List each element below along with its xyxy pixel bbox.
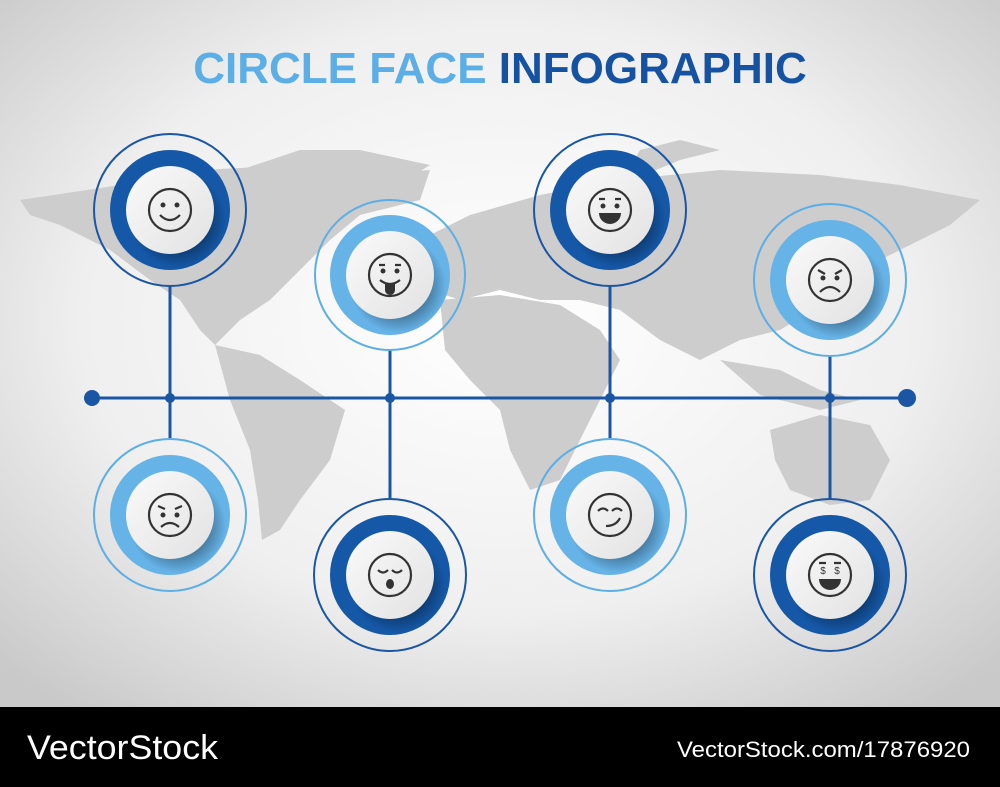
world map bbox=[20, 140, 980, 540]
node 4: angry bbox=[754, 204, 906, 356]
footer text: VectorStock bbox=[27, 729, 219, 767]
node 8: money: $ bbox=[820, 566, 826, 577]
node 7: wink bbox=[534, 439, 686, 591]
node 8: money bbox=[754, 499, 906, 651]
title: CIRCLE FACE INFOGRAPHIC bbox=[193, 44, 807, 93]
node 2: tongue bbox=[315, 200, 465, 350]
node 8: money: $ bbox=[834, 566, 840, 577]
node 5: frown bbox=[94, 439, 246, 591]
node 1: smile bbox=[94, 134, 246, 286]
timeline bbox=[84, 286, 916, 498]
footer bar bbox=[0, 707, 1000, 787]
footer text bbox=[27, 729, 970, 767]
node 3: laugh bbox=[534, 134, 686, 286]
node 6: sleepy bbox=[314, 499, 466, 651]
footer text: VectorStock.com/17876920 bbox=[677, 737, 970, 762]
